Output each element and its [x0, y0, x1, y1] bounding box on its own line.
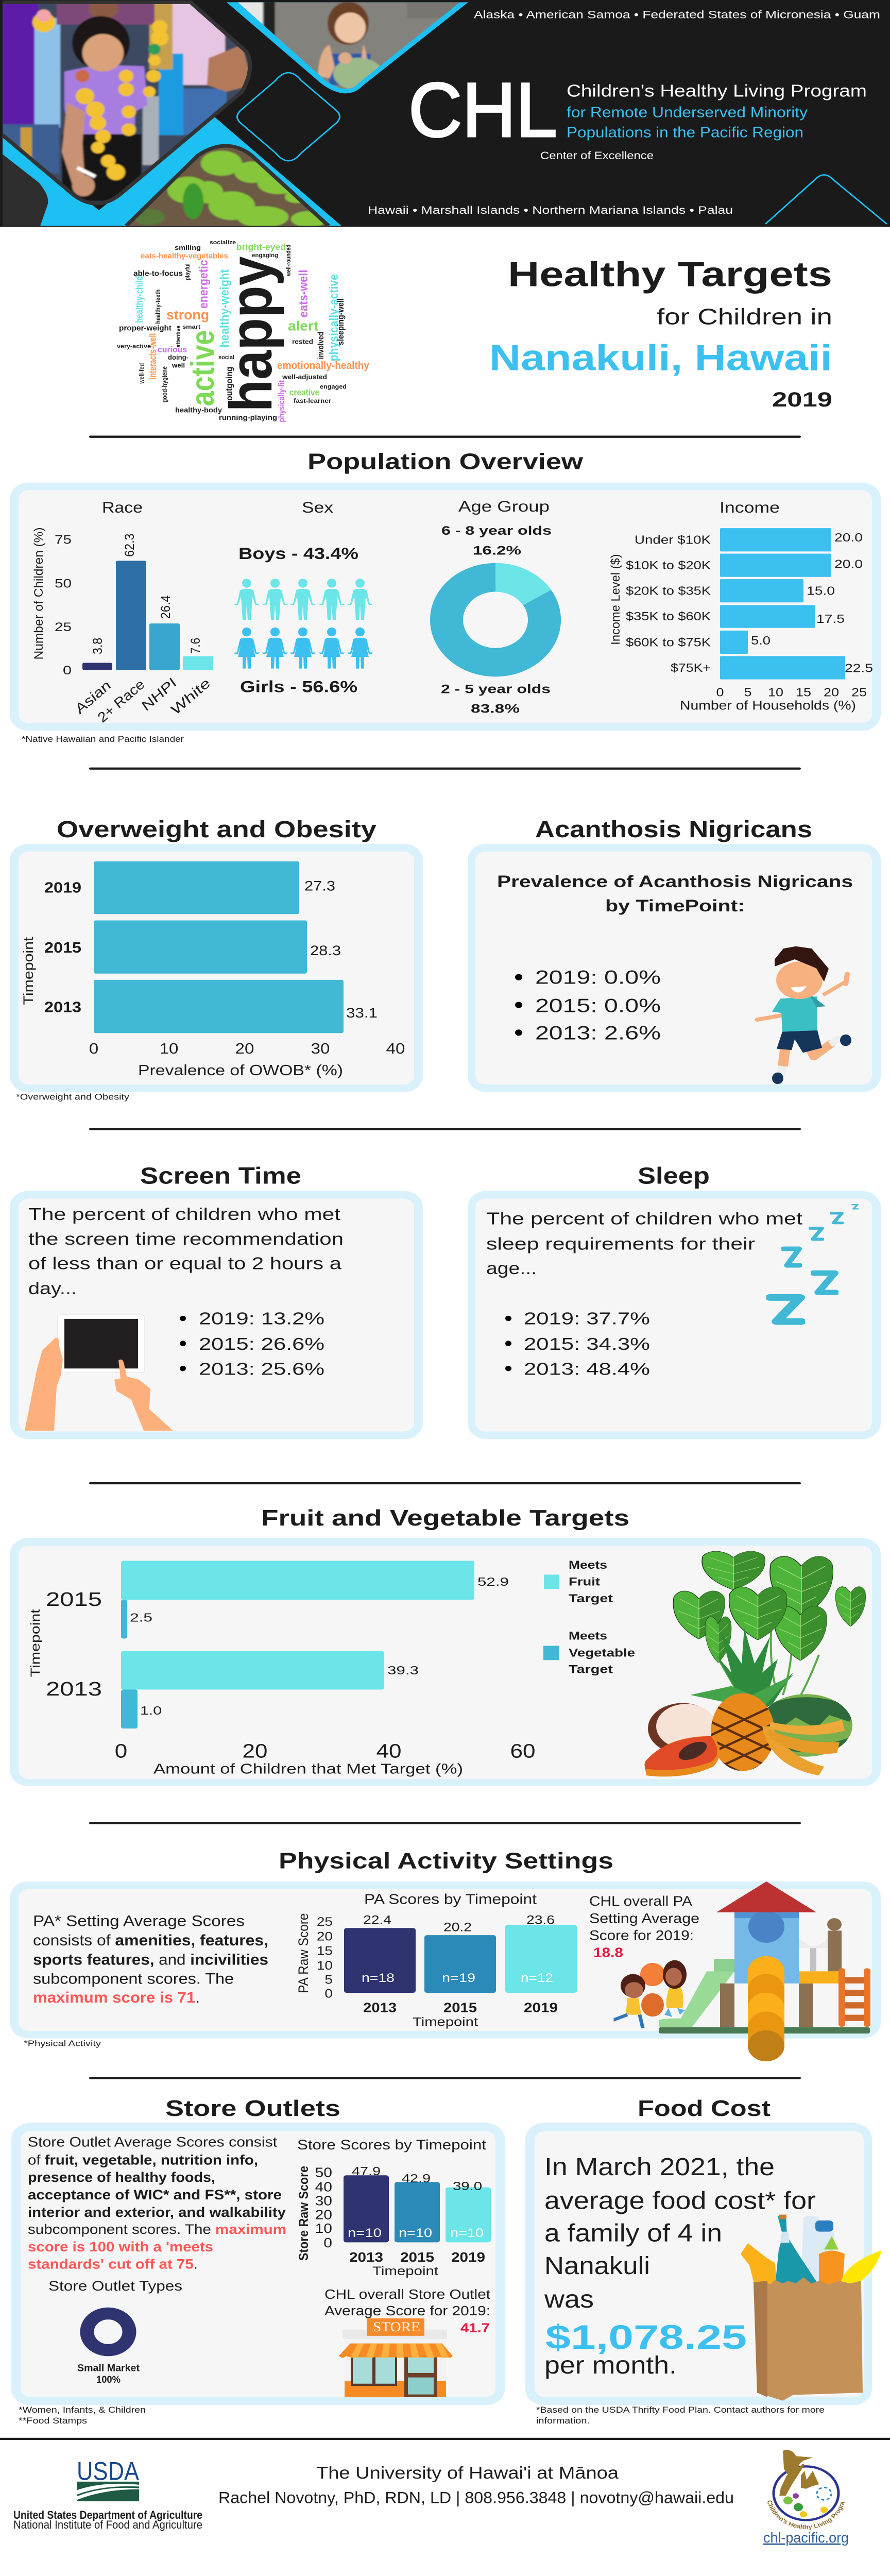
- panel: fruit and vegetable targets: [10, 1538, 881, 1786]
- chart: store scores by timepoint: 50: [315, 2165, 332, 2180]
- panel: screen time: The percent of children who met: [28, 1205, 340, 1224]
- chart: income: Number of Households (%): [680, 698, 856, 713]
- word cloud: bright-eyed: [236, 242, 286, 252]
- chart: store scores by timepoint: n=10: [450, 2226, 484, 2240]
- word cloud: very-active: [117, 343, 151, 350]
- chart: fruit and vegetable bars: 1.0: [140, 1704, 162, 1718]
- footer: contact: The University of Hawai'i at Mānoa: [316, 2463, 619, 2482]
- word cloud: outgoing: [224, 367, 234, 401]
- chart: store scores by timepoint: 2019: [451, 2250, 485, 2264]
- heading: Screen Time: Screen Time: [140, 1163, 301, 1189]
- chart: income: 17.5: [816, 613, 845, 626]
- icon: tablet with hands: [25, 1315, 173, 1431]
- chart: income: $60K to $75K: [626, 636, 711, 649]
- panel: food cost: average food cost* for: [544, 2187, 816, 2214]
- word cloud: smart: [182, 324, 200, 330]
- chart: store outlet types donut: Store Outlet Types: [48, 2279, 182, 2294]
- chart: race: Asian: [70, 678, 115, 717]
- pictogram: sex: Boys - 43.4%: [238, 545, 358, 563]
- chart: income: Income Level ($): [609, 554, 622, 645]
- icon: grocery bag: [741, 2215, 882, 2401]
- chart: PA scores by timepoint: 2013: [363, 2000, 397, 2015]
- callout: CHL overall PA score: Score for 2019:: [589, 1928, 694, 1943]
- pictogram: sex: [234, 499, 373, 696]
- title block: Nanakuli, Hawaii: [489, 338, 832, 379]
- chart: age group donut: 2 - 5 year olds: [441, 682, 551, 696]
- header logo text: Center of Excellence: [540, 149, 654, 162]
- heading: Acanthosis Nigricans: Acanthosis Nigricans: [535, 817, 812, 842]
- chart: store scores by timepoint: Store Raw Score: [297, 2166, 311, 2261]
- panel: overweight and obesity chart: [10, 844, 423, 1092]
- chart: PA scores by timepoint: Timepoint: [413, 2014, 478, 2029]
- heading: Population Overview: Population Overview: [307, 449, 584, 474]
- title block: 2019: [772, 388, 832, 411]
- word cloud: physically-fit: [277, 380, 286, 422]
- chart: PA scores by timepoint: 15: [317, 1943, 333, 1958]
- chart: income: 20.0: [834, 557, 863, 571]
- word cloud: curious: [158, 345, 187, 354]
- footer: contact: Rachel Novotny, PhD, RDN, LD | 808.956.3848 | novotny@hawaii.edu: [218, 2489, 734, 2507]
- panel: food cost: $1,078.25: [545, 2319, 747, 2357]
- chart: race: 62.3: [123, 534, 136, 557]
- chart: income: 15: [796, 686, 811, 699]
- panel: food cost: a family of 4 in: [544, 2219, 722, 2247]
- word cloud: alert: [288, 318, 318, 333]
- word cloud: active: [184, 330, 221, 406]
- panel: overweight and obesity chart: 2013: [44, 998, 81, 1015]
- chart: store scores by timepoint: 2015: [400, 2250, 434, 2264]
- panel: sleep: [468, 1191, 881, 1439]
- footer: USDA logo: National Institute of Food and Agriculture: [13, 2519, 202, 2532]
- word cloud: well-adjusted: [282, 373, 327, 381]
- legend: Meets: [569, 1630, 607, 1642]
- header regions list top: Alaska • American Samoa • Federated States of Micronesia • Guam: [474, 9, 880, 21]
- chart: store scores by timepoint: n=10: [399, 2226, 432, 2240]
- chart: income: 5.0: [751, 634, 771, 647]
- word cloud: attentive: [175, 326, 182, 347]
- word cloud: well: [172, 361, 185, 369]
- chart: income: 15.0: [807, 584, 835, 598]
- chart: PA scores by timepoint: n=12: [521, 1971, 553, 1985]
- photo: toddler with bag: [227, 0, 469, 98]
- panel: screen time: of less than or equal to 2 hours a: [28, 1254, 341, 1273]
- chart: race: [32, 499, 214, 725]
- text: store description: score is 100 with a 'meets: [28, 2240, 213, 2255]
- chart: store scores by timepoint: 42.9: [402, 2172, 431, 2185]
- chart: PA scores by timepoint: n=18: [362, 1971, 395, 1985]
- word cloud: able-to-focus: [133, 270, 183, 278]
- header logo text: [408, 67, 867, 162]
- chart: PA scores by timepoint: 2019: [524, 2000, 558, 2015]
- word cloud: energetic: [197, 260, 210, 309]
- icon: store front: [339, 2318, 453, 2397]
- header regions list bottom: Hawaii • Marshall Islands • Northern Mariana Islands • Palau: [368, 204, 733, 216]
- chart: fruit and vegetable bars: Amount of Children that Met Target (%): [153, 1761, 463, 1777]
- chart: PA scores by timepoint: 20: [317, 1929, 333, 1943]
- footer: USDA logo: United States Department of Agriculture: [13, 2509, 202, 2521]
- callout: CHL overall store score: 41.7: [460, 2320, 490, 2335]
- heading: Food Cost: Food Cost: [638, 2096, 771, 2121]
- heading: Sleep: Sleep: [638, 1163, 710, 1189]
- panel: sleep: 2019: 37.7%: [524, 1309, 650, 1328]
- chart: store scores by timepoint: Store Scores by Timepoint: [297, 2138, 486, 2153]
- title block: Healthy Targets: [508, 255, 832, 294]
- chart: PA scores by timepoint: 23.6: [526, 1912, 555, 1927]
- chart: race: 0: [63, 663, 72, 677]
- word cloud: social: [218, 354, 234, 361]
- panel: overweight and obesity chart: 30: [311, 1040, 330, 1057]
- chart: PA scores by timepoint: 22.4: [363, 1912, 391, 1927]
- chart: store scores by timepoint: 2013: [349, 2250, 383, 2264]
- pictogram: sex: Sex: [302, 499, 333, 516]
- chart: age group donut: 83.8%: [471, 701, 520, 716]
- word cloud: healthy-child: [134, 276, 145, 323]
- header logo text: Children's Healthy Living Program: [567, 81, 867, 100]
- panel: acanthosis nigricans: Prevalence of Acanthosis Nigricans: [497, 873, 853, 891]
- text: store description: standards' cut off at 75.: [28, 2257, 198, 2272]
- chart: PA scores by timepoint: [296, 1891, 577, 2029]
- chart: fruit and vegetable bars: [28, 1561, 535, 1777]
- word cloud: engaging: [252, 252, 278, 259]
- chart: income: 10: [768, 686, 783, 699]
- heading: Overweight and Obesity: Overweight and Obesity: [57, 817, 376, 842]
- title block: [489, 255, 832, 411]
- word cloud: emotionally-healthy: [277, 360, 369, 371]
- text: PA description: consists of amenities, features,: [33, 1931, 268, 1949]
- word cloud: creative: [289, 387, 319, 397]
- panel: screen time: day...: [28, 1279, 77, 1298]
- word cloud: rested: [292, 337, 313, 345]
- chart: store scores by timepoint: n=10: [348, 2226, 382, 2240]
- panel: acanthosis nigricans: 2019: 0.0%: [535, 967, 661, 988]
- panel: acanthosis nigricans: 2015: 0.0%: [535, 995, 661, 1016]
- chart: income: 0: [716, 686, 724, 699]
- footnote: NHPI: *Native Hawaiian and Pacific Islander: [22, 734, 184, 744]
- panel: overweight and obesity chart: Timepoint: [21, 937, 36, 1005]
- callout: CHL overall PA score: Setting Average: [589, 1911, 699, 1926]
- chart: PA scores by timepoint: 25: [317, 1914, 333, 1928]
- word cloud: healthy-teeth: [154, 290, 162, 324]
- panel: sleep: sleep requirements for their: [486, 1234, 755, 1253]
- icon: fruit and taro leaves: [644, 1551, 866, 1776]
- panel: overweight and obesity chart: 27.3: [304, 878, 335, 894]
- word cloud: good-hygiene: [161, 366, 168, 402]
- word cloud: involved: [316, 332, 326, 359]
- chart: age group donut: 6 - 8 year olds: [441, 523, 552, 538]
- footnote: OWOB: *Overweight and Obesity: [16, 1092, 129, 1101]
- panel: physical activity settings: [10, 1882, 881, 2061]
- text: PA description: sports features, and incivilities: [33, 1951, 268, 1968]
- panel: overweight and obesity chart: 33.1: [346, 1006, 378, 1021]
- chart: income: $75K+: [671, 661, 711, 674]
- callout: CHL overall PA score: CHL overall PA: [589, 1894, 693, 1909]
- legend: Target: [569, 1592, 613, 1605]
- header logo text: Populations in the Pacific Region: [567, 124, 803, 141]
- word cloud: playful: [184, 263, 191, 280]
- panel: acanthosis nigricans: 2013: 2.6%: [535, 1022, 661, 1044]
- chart: store scores by timepoint: 30: [315, 2193, 332, 2208]
- chart: store scores by timepoint: 10: [315, 2221, 332, 2236]
- icon: store front: STORE: [373, 2320, 420, 2335]
- header logo text: CHL: [408, 67, 557, 153]
- chart: income: Income: [720, 499, 780, 516]
- chart: store outlet types donut: Small Market: [77, 2363, 140, 2374]
- text: store description: Store Outlet Average Scores consist: [28, 2134, 277, 2150]
- word cloud: physically-active: [327, 274, 340, 361]
- icon: sleeping Zs: [771, 1205, 858, 1321]
- chart: race: Number of Children (%): [32, 527, 45, 659]
- chart: income: $20K to $35K: [626, 584, 711, 598]
- panel: screen time: [10, 1191, 423, 1439]
- word cloud: doing-: [168, 353, 189, 361]
- footer: website link: chl-pacific.org: [763, 2530, 849, 2546]
- panel: screen time: the screen time recommendation: [28, 1229, 344, 1248]
- chart: PA scores by timepoint: PA Scores by Timepoint: [364, 1891, 537, 1907]
- chart: store scores by timepoint: 0: [323, 2235, 332, 2250]
- chart: income: $10K to $20K: [626, 559, 711, 572]
- legend: Fruit: [569, 1575, 600, 1588]
- chart: race: 25: [55, 620, 72, 634]
- text: store description: presence of healthy foods,: [28, 2170, 215, 2185]
- heading: Physical Activity Settings: Physical Activity Settings: [279, 1849, 613, 1873]
- legend: [543, 1559, 635, 1676]
- chart: fruit and vegetable bars: 40: [376, 1740, 401, 1762]
- panel: acanthosis nigricans: [468, 844, 881, 1092]
- chart: fruit and vegetable bars: 60: [510, 1740, 535, 1762]
- chart: PA scores by timepoint: PA Raw Score: [296, 1913, 311, 1993]
- chart: PA scores by timepoint: n=19: [442, 1971, 475, 1985]
- word cloud: engaged: [320, 383, 347, 390]
- icon: triangle outline: [765, 175, 887, 224]
- chart: store scores by timepoint: 39.0: [453, 2179, 482, 2193]
- panel: store outlets: [11, 2123, 505, 2405]
- callout: CHL overall PA score: 18.8: [593, 1945, 623, 1960]
- panel: overweight and obesity chart: 28.3: [310, 943, 341, 959]
- photo: lettuce field: [125, 144, 330, 227]
- chart: race: White: [166, 675, 214, 717]
- word cloud: well-fed: [139, 363, 145, 384]
- chart: age group donut: [441, 498, 552, 716]
- panel: food cost: was: [544, 2286, 594, 2313]
- chart: income: 22.5: [845, 662, 873, 675]
- chart: fruit and vegetable bars: 0: [115, 1740, 127, 1762]
- footnote: physical activity: *Physical Activity: [24, 2039, 101, 2048]
- callout: CHL overall store score: Average Score for 2019:: [324, 2303, 490, 2318]
- footer: USDA logo: [13, 2456, 202, 2532]
- header logo text: for Remote Underserved Minority: [567, 104, 808, 121]
- chart: income: [609, 499, 873, 713]
- legend: Meets: [569, 1559, 607, 1572]
- chart: income: 25: [851, 686, 867, 699]
- panel: screen time: 2015: 26.6%: [199, 1334, 324, 1353]
- panel: food cost: In March 2021, the: [544, 2154, 775, 2181]
- chart: age group donut: Age Group: [458, 498, 550, 515]
- chart: store scores by timepoint: [297, 2138, 491, 2278]
- text: store description: interior and exterior, and walkability: [28, 2205, 286, 2220]
- chart: race: 75: [55, 532, 72, 547]
- text: store description: subcomponent scores. The maximum: [28, 2222, 286, 2237]
- text: PA description: subcomponent scores. The: [33, 1970, 234, 1987]
- title block: for Children in: [657, 304, 832, 329]
- chart: store scores by timepoint: 47.9: [352, 2165, 381, 2178]
- chart: race: NHPI: [137, 675, 181, 713]
- panel: acanthosis nigricans: by TimePoint:: [605, 897, 745, 916]
- footnote: WIC and FS: [19, 2405, 146, 2426]
- text: store description: of fruit, vegetable, nutrition info,: [28, 2153, 258, 2168]
- footnote: food plan: *Based on the USDA Thrifty Food Plan. Contact authors for more: [536, 2405, 825, 2415]
- word cloud: happy: [218, 256, 285, 412]
- chart: fruit and vegetable bars: 52.9: [477, 1575, 509, 1589]
- callout: CHL overall store score: [324, 2287, 490, 2335]
- chart: race: 2+ Race: [93, 677, 148, 725]
- callout: CHL overall store score: CHL overall Store Outlet: [324, 2287, 490, 2301]
- chart: income: Under $10K: [635, 533, 711, 547]
- chart: store scores by timepoint: 20: [315, 2207, 332, 2222]
- chart: race: Race: [102, 499, 143, 516]
- word cloud: well-rounded: [285, 245, 292, 276]
- panel: overweight and obesity chart: 40: [386, 1040, 405, 1057]
- panel: overweight and obesity chart: 20: [235, 1040, 254, 1057]
- legend: Vegetable: [569, 1647, 635, 1659]
- word cloud: proper-weight: [119, 324, 172, 332]
- chart: fruit and vegetable bars: 2.5: [130, 1611, 152, 1624]
- chart: fruit and vegetable bars: 20: [243, 1740, 267, 1762]
- chart: income: $35K to $60K: [626, 610, 711, 623]
- chart: fruit and vegetable bars: Timepoint: [28, 1609, 42, 1677]
- footer: CHL round logo: Children's Healthy Living Program: [767, 2501, 845, 2530]
- footnote: WIC and FS: **Food Stamps: [19, 2416, 87, 2426]
- text: PA description: [33, 1912, 268, 2006]
- word cloud: eats-healthy-vegetables: [141, 252, 228, 260]
- callout: CHL overall PA score: [589, 1894, 699, 1960]
- word cloud: interacts-well: [147, 333, 158, 380]
- footnote: WIC and FS: *Women, Infants, & Children: [19, 2405, 146, 2415]
- chart: race: 3.8: [91, 638, 105, 654]
- panel: food cost: [525, 2123, 882, 2405]
- icon: diamond outline: [237, 73, 340, 161]
- text: store description: [28, 2134, 286, 2272]
- chart: store outlet types donut: 100%: [96, 2374, 121, 2385]
- panel: screen time: 2013: 25.6%: [199, 1360, 324, 1379]
- text: PA description: PA* Setting Average Scores: [33, 1912, 245, 1929]
- chart: income: 20: [824, 686, 839, 699]
- panel: population overview: [10, 483, 881, 731]
- footnote: food plan: [536, 2405, 825, 2426]
- text: PA description: maximum score is 71.: [33, 1989, 200, 2006]
- word cloud: socialize: [210, 239, 236, 246]
- text: store description: acceptance of WIC* and FS**, store: [28, 2188, 282, 2203]
- panel: overweight and obesity chart: Prevalence of OWOB* (%): [138, 1062, 343, 1078]
- chart: PA scores by timepoint: 10: [317, 1958, 333, 1972]
- icon: playground with children: [615, 1882, 870, 2061]
- word cloud: healthy-body: [175, 406, 222, 414]
- chart: fruit and vegetable bars: 2013: [46, 1677, 102, 1700]
- icon: running boy: [757, 946, 851, 1084]
- chart: race: 7.6: [189, 638, 202, 654]
- chart: race: 26.4: [159, 595, 173, 619]
- footnote: food plan: information.: [536, 2416, 590, 2426]
- panel: overweight and obesity chart: 0: [89, 1040, 98, 1057]
- heading: Store Outlets: Store Outlets: [165, 2096, 340, 2121]
- word cloud: eats-well: [297, 269, 310, 317]
- chart: PA scores by timepoint: 20.2: [443, 1920, 472, 1934]
- footer: contact: [218, 2463, 734, 2507]
- header banner: [0, 0, 890, 228]
- chart: race: 50: [55, 576, 72, 590]
- panel: sleep: 2013: 48.4%: [524, 1360, 650, 1379]
- chart: income: 5: [744, 686, 752, 699]
- panel: overweight and obesity chart: 2019: [44, 879, 81, 896]
- word cloud: strong: [166, 308, 209, 322]
- word cloud: healthy-weight: [218, 269, 231, 347]
- panel: overweight and obesity chart: 2015: [44, 939, 81, 956]
- word cloud: running-playing: [219, 414, 277, 422]
- panel: overweight and obesity chart: 10: [160, 1040, 178, 1057]
- heading: Fruit and Vegetable Targets: Fruit and Vegetable Targets: [261, 1505, 629, 1530]
- chart: income: 20.0: [834, 531, 863, 545]
- word cloud: fast-learner: [294, 397, 331, 404]
- chart: store scores by timepoint: 40: [315, 2179, 332, 2194]
- chart: age group donut: 16.2%: [473, 543, 521, 557]
- chart: store scores by timepoint: Timepoint: [372, 2264, 439, 2278]
- chart: PA scores by timepoint: 5: [324, 1972, 333, 1987]
- panel: food cost: Nanakuli: [544, 2252, 650, 2280]
- word cloud: [117, 239, 369, 422]
- chart: fruit and vegetable bars: 39.3: [387, 1664, 419, 1677]
- chart: store outlet types donut: [48, 2279, 182, 2385]
- chart: PA scores by timepoint: 0: [324, 1986, 333, 2001]
- panel: sleep: The percent of children who met: [486, 1209, 802, 1228]
- chart: fruit and vegetable bars: 2015: [46, 1588, 102, 1611]
- word cloud: sleeping-well: [336, 298, 346, 345]
- photo: girl with lei: [0, 0, 258, 215]
- legend: Target: [569, 1663, 613, 1676]
- panel: sleep: age...: [486, 1259, 537, 1278]
- word cloud: smiling: [175, 244, 201, 251]
- panel: screen time: 2019: 13.2%: [199, 1309, 324, 1328]
- footer: USDA logo: USDA: [77, 2456, 140, 2485]
- chart: PA scores by timepoint: 2015: [443, 2000, 477, 2015]
- panel: food cost: per month.: [544, 2351, 677, 2379]
- panel: sleep: 2015: 34.3%: [524, 1334, 650, 1353]
- pictogram: sex: Girls - 56.6%: [240, 678, 357, 696]
